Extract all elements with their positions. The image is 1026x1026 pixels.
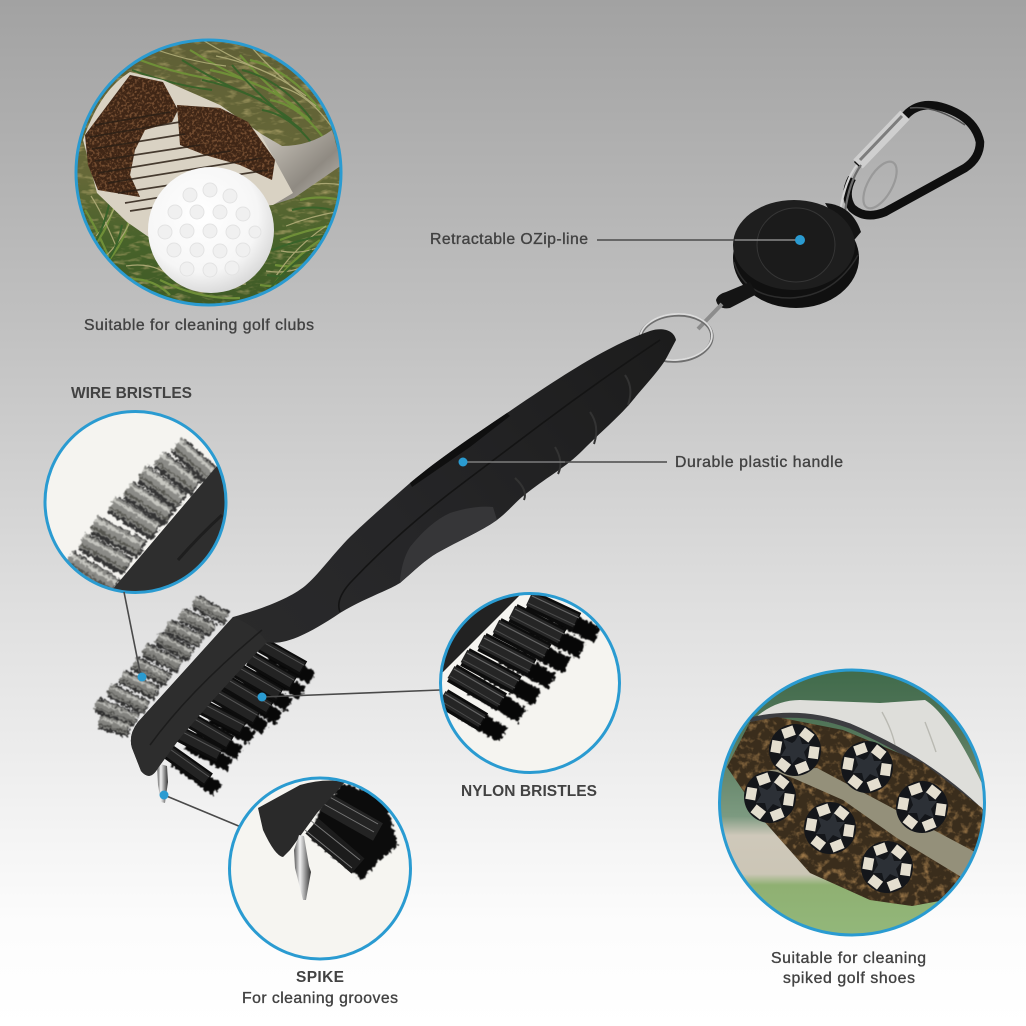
upper dark strip	[410, 413, 510, 487]
retractable zip-line reel and carabiner	[698, 105, 980, 329]
panel: golf club photo circle	[70, 35, 350, 310]
handle contour ridge	[339, 340, 660, 612]
zoom brush head	[258, 781, 345, 857]
club face with dirt	[83, 72, 293, 238]
panel: spike zoom circle	[225, 775, 415, 965]
label: retractable zip-line: Retractable OZip-line	[430, 231, 588, 248]
panel: wire bristles heading: WIRE BRISTLES	[71, 385, 192, 402]
key ring	[840, 156, 903, 214]
label: suitable for cleaning spiked golf shoes	[771, 950, 926, 987]
grip ridges	[515, 375, 630, 500]
carabiner	[848, 105, 980, 215]
panel: golf shoe photo circle	[715, 665, 990, 940]
carabiner gate	[858, 115, 905, 164]
zoom spike	[294, 835, 311, 900]
zoom nylon tufts	[441, 596, 597, 735]
brush head in zoom	[442, 596, 520, 672]
brush: black plastic handle and head	[131, 329, 676, 776]
label: suitable for cleaning spiked golf shoes: Suitable for cleaning	[771, 950, 926, 967]
cleats	[744, 724, 948, 893]
label: for cleaning grooves: For cleaning grooves	[242, 990, 398, 1007]
text: suitable for cleaning golf clubs: Suitable for cleaning golf clubs	[84, 317, 314, 334]
label: suitable for cleaning spiked golf shoes: spiked golf shoes	[783, 970, 915, 987]
callout dots	[138, 235, 805, 800]
label: nylon bristles: NYLON BRISTLES	[461, 783, 597, 800]
brush: wire bristles	[95, 599, 228, 732]
sole plate	[768, 768, 975, 878]
lighter grip pad	[400, 507, 497, 583]
panel: nylon bristles zoom circle	[435, 590, 625, 780]
label: durable plastic handle: Durable plastic handle	[675, 454, 843, 471]
zoom wire bristle tufts	[67, 441, 213, 590]
reel connector	[716, 282, 757, 308]
zoom spike bristles	[305, 783, 398, 880]
reel body	[825, 203, 861, 245]
sole rim	[750, 715, 985, 815]
brush head in zoom	[114, 466, 224, 591]
club hosel	[258, 130, 342, 205]
brush: spike	[157, 763, 168, 803]
lines: leaders	[124, 240, 800, 827]
ring joining handle and reel	[638, 312, 714, 363]
label: spike: SPIKE	[296, 969, 344, 986]
muddy sole	[727, 717, 985, 906]
golf ball	[148, 167, 274, 293]
panel: wire bristles zoom circle	[44, 410, 228, 594]
shoe upper	[755, 700, 985, 812]
brush: nylon bristles	[165, 642, 312, 790]
